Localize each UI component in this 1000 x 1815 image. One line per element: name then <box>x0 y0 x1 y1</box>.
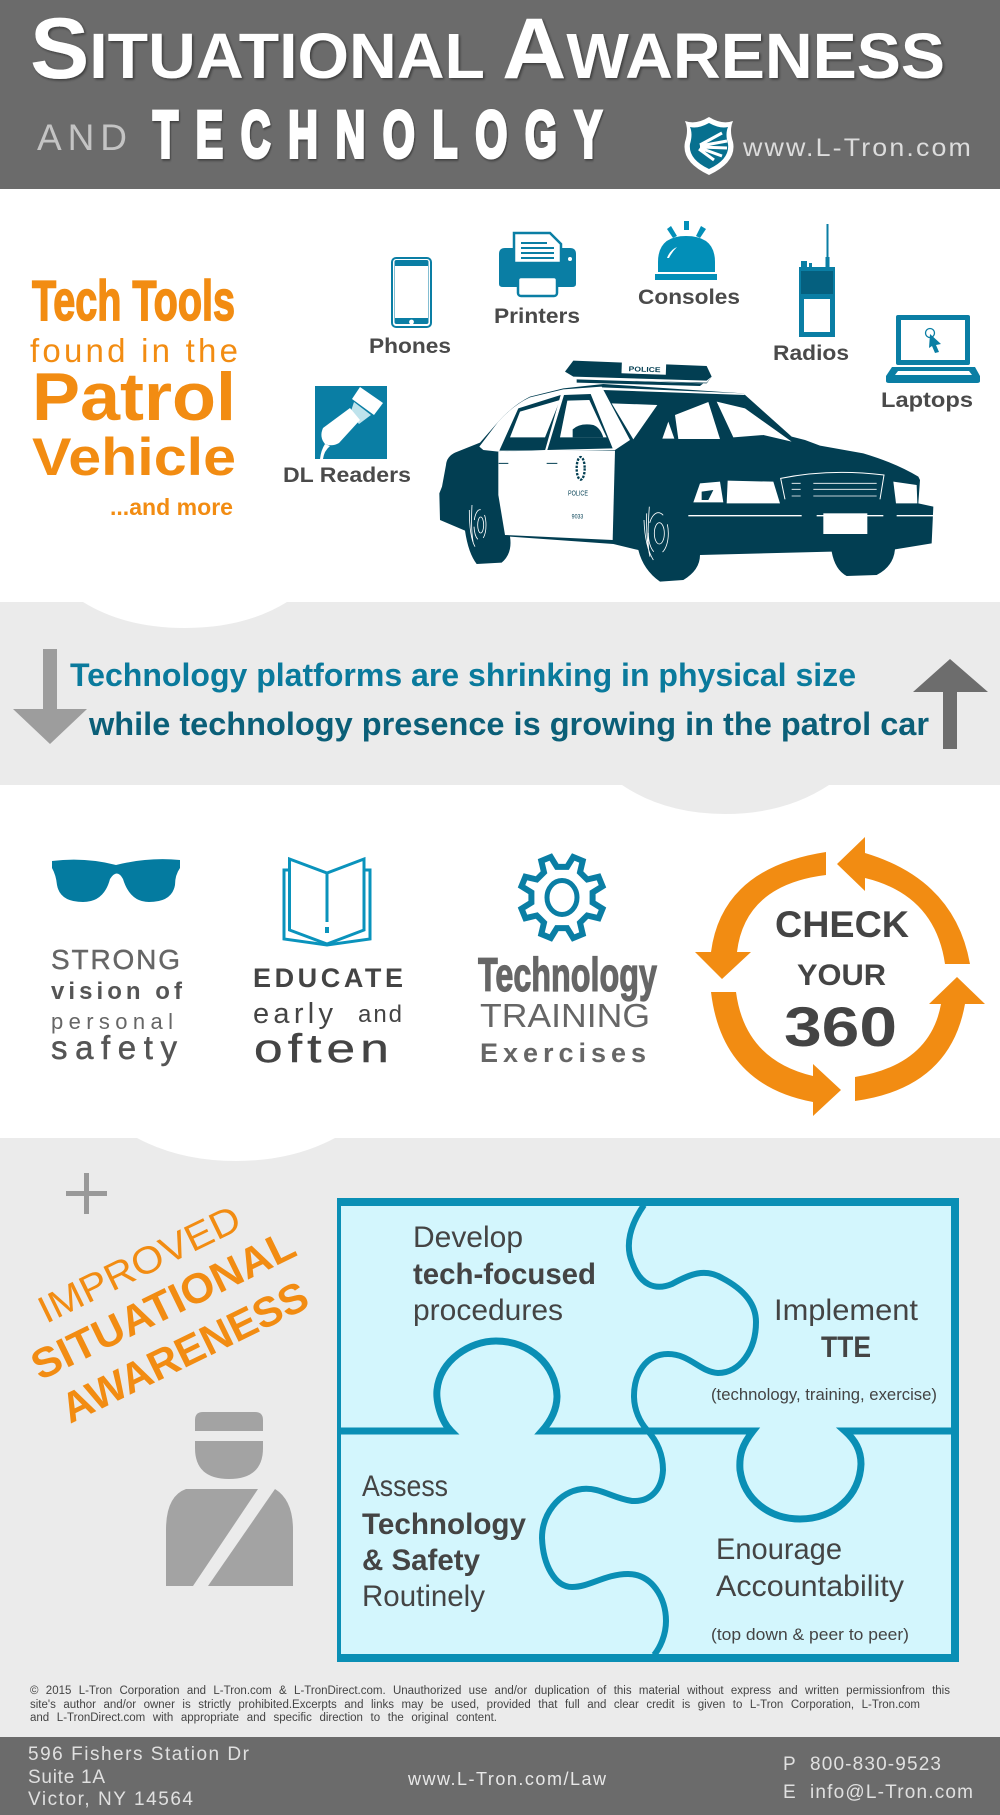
heading: improved situational awareness: AWARENESS <box>53 1272 316 1432</box>
text: technology training exercises: Technology <box>478 948 657 1001</box>
text: educate early and often: early <box>253 998 334 1030</box>
text: implement TTE: (technology, training, exercise) <box>711 1385 937 1404</box>
heading: improved situational awareness: IMPROVED <box>32 1198 248 1332</box>
website url: www.L-Tron.com <box>742 134 973 162</box>
police car: 9033 <box>572 513 584 520</box>
cycle: check your 360: YOUR <box>797 959 886 992</box>
title: Situational Awareness: SITUATIONAL AWARENESS <box>30 1 945 97</box>
address: 596 Fishers Station Dr <box>28 1744 250 1765</box>
icon: sunglasses <box>52 859 180 902</box>
label: Radios: Radios <box>773 342 849 365</box>
roof and pillars <box>479 387 630 452</box>
icon: printer <box>499 233 576 296</box>
contact details: P <box>783 1754 796 1775</box>
icon: L-Tron shield logo <box>684 117 734 175</box>
header banner <box>0 0 1000 189</box>
puzzle connector: vertical lower <box>542 1430 666 1655</box>
cycle: check your 360 <box>695 837 985 1116</box>
address <box>28 1744 250 1810</box>
arrow: top left <box>695 852 826 979</box>
text: assess technology and safety routinely: & Safety <box>362 1544 480 1577</box>
icon: radio <box>799 224 835 337</box>
text: assess technology and safety routinely <box>362 1470 526 1613</box>
icon: plus <box>66 1173 107 1214</box>
label: Phones: Phones <box>369 335 451 358</box>
text: educate early and often <box>253 963 403 1071</box>
icon: officer with seat belt <box>166 1412 293 1586</box>
label: Laptops: Laptops <box>881 389 973 412</box>
heading: tech tools found in the patrol vehicle <box>30 269 238 520</box>
text: implement TTE: Implement <box>774 1294 919 1327</box>
copyright notice: site's author and/or owner is strictly prohibited.Excerpts and links may be used, provided that full and clear credit is given to L-Tron Corporation, L-Tron.com <box>30 1699 920 1711</box>
title: TECHNOLOGY: TECHNOLOGY <box>153 97 602 171</box>
icon: DL reader <box>315 386 387 459</box>
puzzle connector: vertical upper <box>629 1205 756 1430</box>
callout: technology platforms statement: while technology presence is growing in the patrol car <box>88 706 929 742</box>
label: DL Readers: DL Readers <box>283 464 411 487</box>
puzzle frame <box>337 1198 341 1662</box>
heading: tech tools found in the patrol vehicle: found in the <box>30 332 238 369</box>
door panels <box>498 450 615 540</box>
callout: technology platforms statement <box>13 649 988 749</box>
bumper and plate <box>688 514 933 518</box>
text: implement TTE: TTE <box>821 1331 871 1364</box>
title: AND: AND <box>37 117 127 158</box>
footer bar <box>0 1737 1000 1815</box>
address: Suite 1A <box>28 1767 105 1788</box>
headlights <box>693 482 723 502</box>
text: technology training exercises: Exercises <box>480 1038 646 1068</box>
text: strong vision of personal safety: STRONG <box>51 944 180 975</box>
arrow: top right <box>837 837 970 964</box>
text: encourage accountability: (top down & peer to peer) <box>711 1625 909 1644</box>
text: educate early and often: EDUCATE <box>253 963 403 993</box>
cycle: check your 360: 360 <box>784 995 897 1058</box>
cycle: check your 360: CHECK <box>775 904 909 945</box>
icon: laptop <box>886 315 980 383</box>
contact details: 800-830-9523 <box>810 1754 941 1775</box>
puzzle connector: horizontal <box>337 1341 955 1519</box>
heading: tech tools found in the patrol vehicle: Vehicle <box>32 428 236 487</box>
label: Consoles: Consoles <box>638 286 740 309</box>
police car: POLICE <box>628 366 661 374</box>
arrow: down <box>13 649 87 744</box>
text: technology training exercises <box>478 948 657 1068</box>
text: develop tech-focused procedures: Develop <box>413 1221 523 1254</box>
text: encourage accountability <box>711 1533 909 1644</box>
heading: improved situational awareness <box>23 1198 316 1432</box>
puzzle panel <box>337 1198 955 1662</box>
light bar <box>565 361 712 383</box>
icon: console beacon <box>655 221 717 280</box>
seat <box>573 424 603 437</box>
text: educate early and often: and <box>358 1001 402 1028</box>
text: implement TTE <box>711 1294 937 1404</box>
heading: tech tools found in the patrol vehicle: Tech Tools <box>32 269 235 333</box>
copyright notice <box>30 1685 950 1724</box>
rear window frame <box>499 395 561 451</box>
contact details <box>783 1754 973 1803</box>
wheels <box>469 505 668 560</box>
police car <box>439 361 933 582</box>
text: strong vision of personal safety: personal <box>51 1009 173 1034</box>
heading: improved situational awareness: SITUATIONAL <box>23 1221 303 1389</box>
icon: gear <box>522 857 602 938</box>
windows <box>510 400 560 437</box>
text: educate early and often: often <box>254 1027 394 1071</box>
text: assess technology and safety routinely: Routinely <box>362 1580 485 1613</box>
icon: phone <box>392 258 431 327</box>
icon: open book <box>284 859 370 945</box>
footer url: www.L-Tron.com/Law <box>407 1769 607 1789</box>
text: technology training exercises: TRAINING <box>480 997 650 1034</box>
callout: technology platforms statement: Technology platforms are shrinking in physical size <box>70 657 856 693</box>
text: encourage accountability: Accountability <box>716 1570 904 1603</box>
police car: POLICE <box>568 490 588 497</box>
copyright notice: © 2015 L-Tron Corporation and L-Tron.com & L-TronDirect.com. Unauthorized use and/or duplication of this material without express and written permissionfrom this <box>30 1685 950 1697</box>
contact details: info@L-Tron.com <box>810 1782 973 1803</box>
heading: tech tools found in the patrol vehicle: ...and more <box>110 494 233 520</box>
contact details: E <box>783 1782 796 1803</box>
grille <box>781 472 884 499</box>
label: Printers: Printers <box>494 305 580 328</box>
text: strong vision of personal safety: safety <box>51 1029 178 1066</box>
text: assess technology and safety routinely: Assess <box>362 1470 448 1503</box>
arrow: up <box>913 659 988 749</box>
address: Victor, NY 14564 <box>28 1789 193 1810</box>
text: strong vision of personal safety: vision of <box>51 978 183 1005</box>
front window frame <box>547 394 613 450</box>
heading: tech tools found in the patrol vehicle: Patrol <box>32 359 236 435</box>
copyright notice: and L-TronDirect.com with appropriate and specific direction to the original content. <box>30 1712 497 1724</box>
arrow: bottom right <box>855 977 985 1101</box>
arrow: bottom left <box>711 992 841 1116</box>
text: strong vision of personal safety <box>51 944 183 1066</box>
text: develop tech-focused procedures <box>413 1221 596 1327</box>
text: develop tech-focused procedures: tech-focused <box>413 1258 596 1291</box>
text: encourage accountability: Enourage <box>716 1533 842 1566</box>
text: develop tech-focused procedures: procedures <box>413 1294 563 1327</box>
door markings <box>499 462 557 465</box>
text: assess technology and safety routinely: Technology <box>362 1508 526 1541</box>
car body silhouette <box>439 384 933 582</box>
